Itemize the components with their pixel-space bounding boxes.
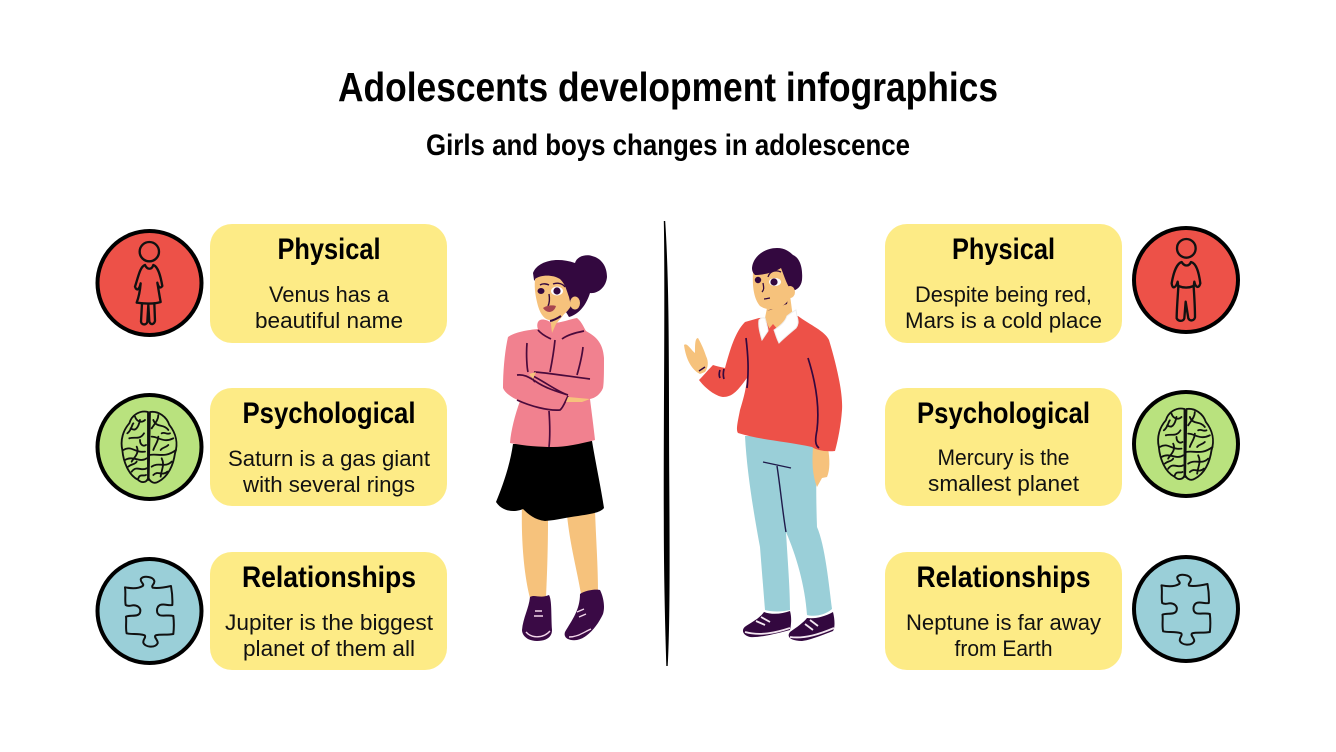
skirt bbox=[496, 441, 604, 521]
head bbox=[535, 276, 571, 320]
panel: boy physical bbox=[885, 224, 1122, 343]
neck bbox=[550, 313, 565, 333]
heading: physical: Physical bbox=[952, 233, 1055, 266]
panel: girl physical bbox=[210, 224, 447, 343]
panel: girl relationships bbox=[210, 552, 447, 670]
text block: mercury: Mercury is the bbox=[938, 445, 1070, 470]
text block: mercury bbox=[928, 445, 1079, 496]
text block: mars bbox=[905, 282, 1102, 333]
panel: boy relationships bbox=[885, 552, 1122, 670]
icon: puzzle in blue circle (girl) bbox=[98, 559, 202, 663]
face details bbox=[769, 278, 781, 286]
text block: jupiter: Jupiter is the biggest bbox=[225, 610, 433, 635]
icon: girl figure in red circle bbox=[98, 231, 202, 335]
subtitle: Girls and boys changes in adolescence bbox=[426, 129, 910, 162]
icon: brain in green circle (girl) bbox=[98, 395, 202, 499]
icon: puzzle in blue circle (boy) bbox=[1134, 557, 1238, 661]
neck bbox=[765, 295, 793, 335]
text block: saturn bbox=[228, 446, 430, 497]
text block: venus bbox=[255, 282, 403, 333]
heading: relationships: Relationships bbox=[242, 561, 416, 594]
hand right bbox=[812, 448, 829, 487]
text block: mercury: smallest planet bbox=[928, 471, 1079, 496]
text block: neptune: Neptune is far away bbox=[906, 610, 1101, 635]
text block: mars: Despite being red, bbox=[915, 282, 1092, 307]
text block: neptune: from Earth bbox=[954, 636, 1052, 661]
hand left bbox=[684, 338, 708, 374]
heading: physical: Physical bbox=[278, 233, 380, 266]
text block: jupiter bbox=[225, 610, 433, 661]
title: Adolescents development infographics bbox=[338, 64, 998, 110]
shoes bbox=[522, 590, 604, 641]
text block: neptune bbox=[906, 610, 1101, 661]
heading: relationships: Relationships bbox=[916, 561, 1090, 594]
panel: boy psychological bbox=[885, 388, 1122, 506]
back hair and bun bbox=[533, 255, 607, 317]
trousers bbox=[745, 436, 832, 616]
sweater bbox=[699, 316, 842, 451]
heading: psychological: Psychological bbox=[917, 397, 1090, 430]
girl illustration bbox=[496, 255, 607, 641]
text block: mars: Mars is a cold place bbox=[905, 308, 1102, 333]
text block: saturn: with several rings bbox=[242, 472, 415, 497]
text block: venus: beautiful name bbox=[255, 308, 403, 333]
icon: boy figure in red circle bbox=[1134, 228, 1238, 332]
collar bbox=[759, 310, 798, 343]
head bbox=[753, 266, 791, 309]
legs bbox=[522, 505, 598, 598]
icon: brain in green circle (boy) bbox=[1134, 392, 1238, 496]
text block: venus: Venus has a bbox=[269, 282, 390, 307]
text block: jupiter: planet of them all bbox=[243, 636, 415, 661]
hair bbox=[752, 248, 802, 291]
boy illustration bbox=[684, 248, 842, 641]
shoes bbox=[743, 611, 834, 641]
face details bbox=[540, 283, 565, 306]
centre divider line bbox=[664, 221, 669, 666]
jacket bbox=[503, 318, 604, 447]
heading: psychological: Psychological bbox=[242, 397, 416, 430]
text block: saturn: Saturn is a gas giant bbox=[228, 446, 430, 471]
panel: girl psychological bbox=[210, 388, 447, 506]
